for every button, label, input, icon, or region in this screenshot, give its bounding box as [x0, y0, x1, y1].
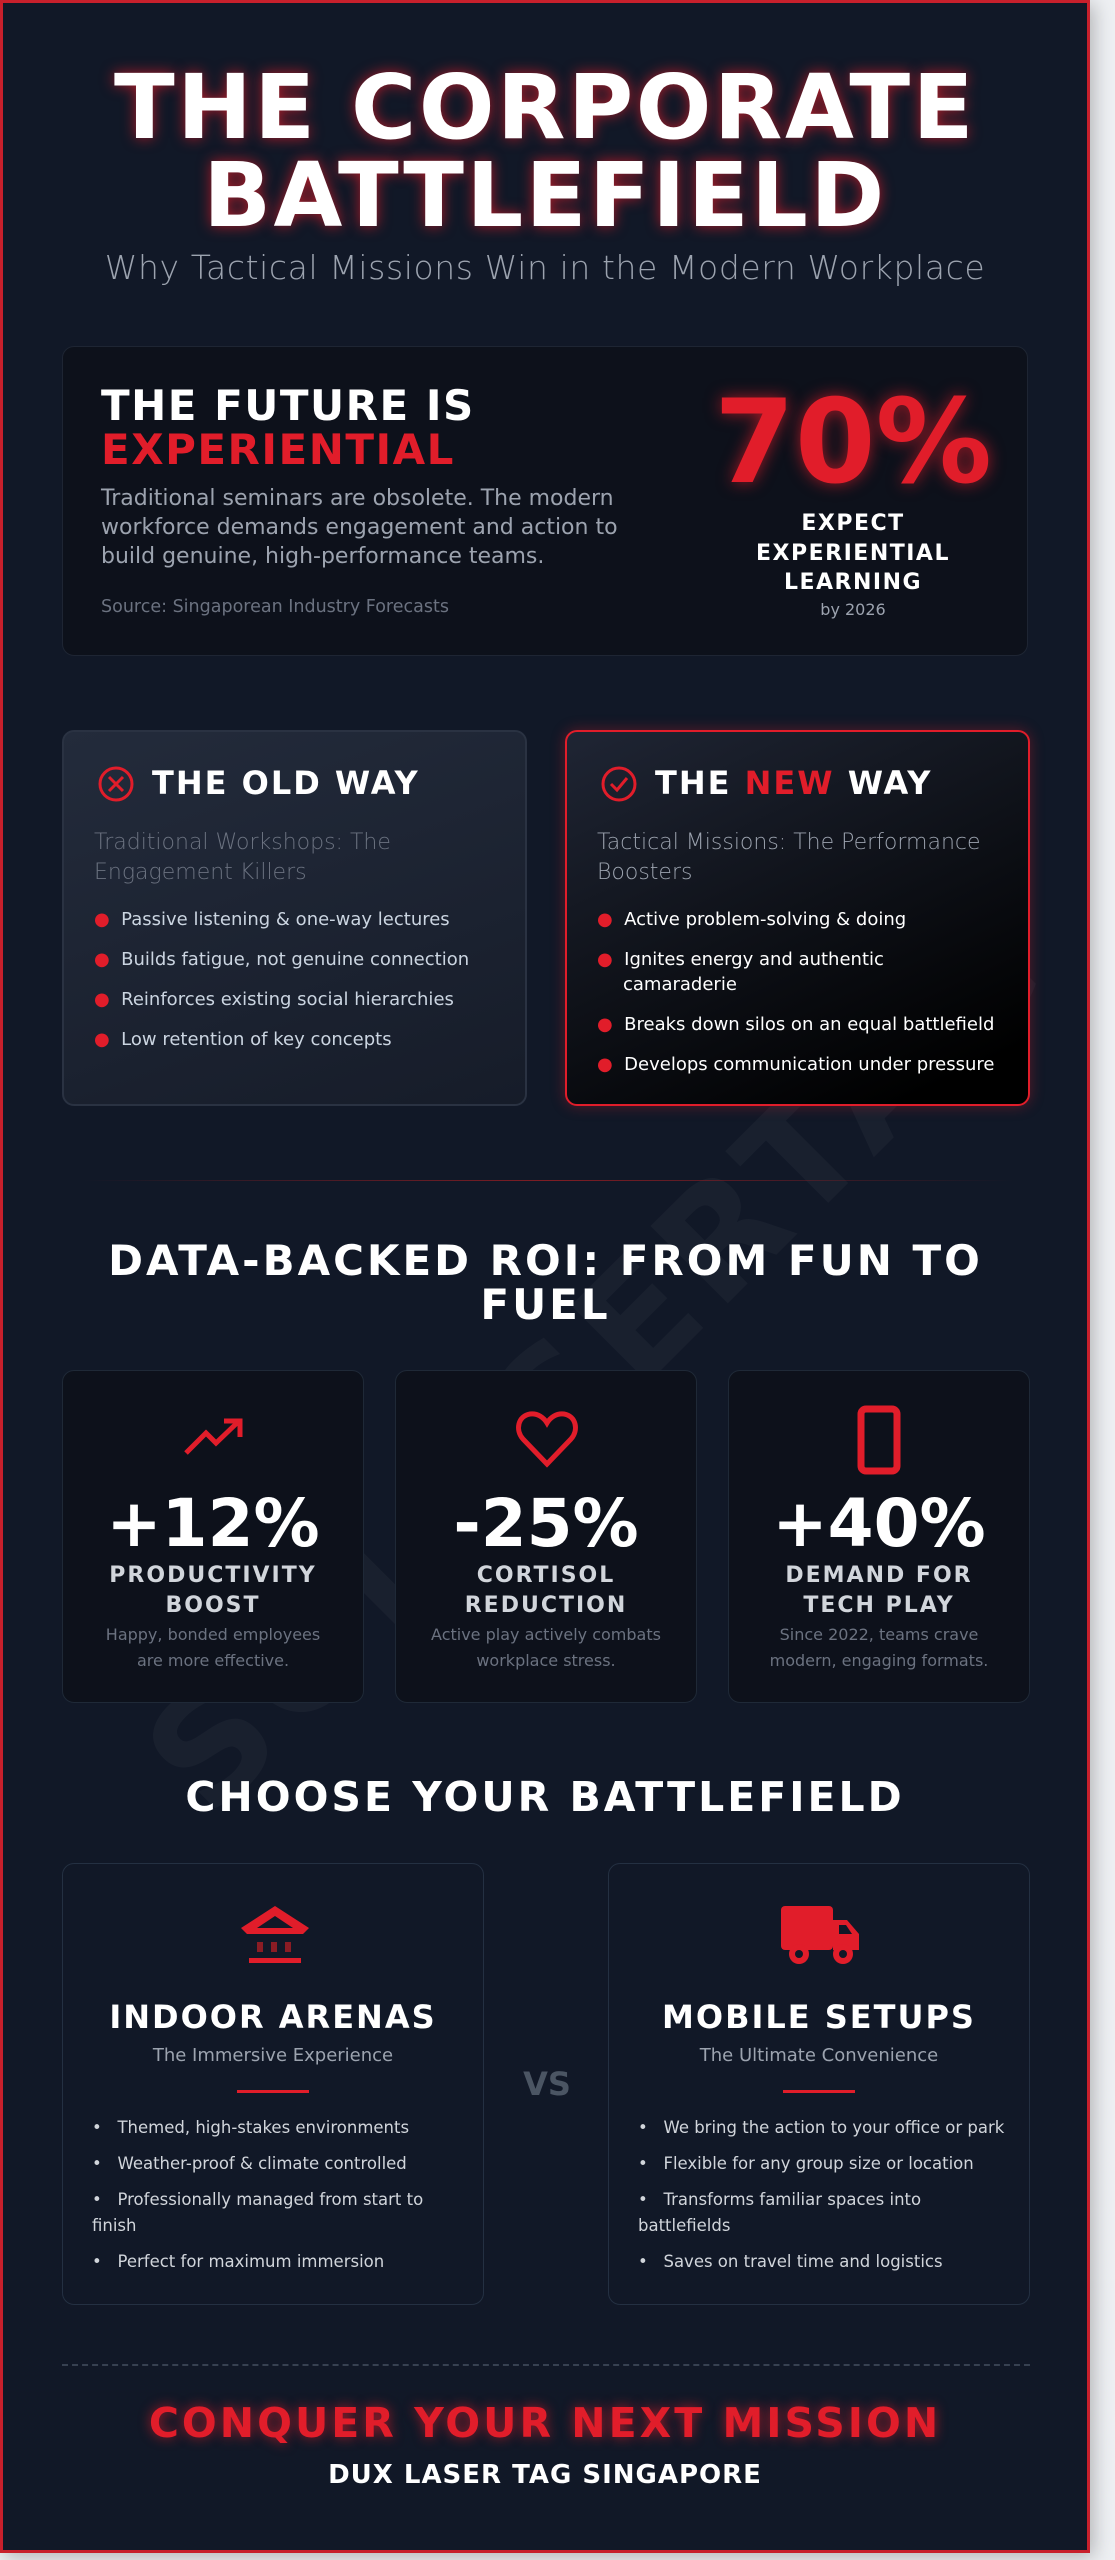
- subtitle: new: Tactical Missions: The Performance Boosters: [597, 830, 981, 885]
- list: mobile: • Flexible for any group size or location: [638, 2154, 974, 2173]
- heading: future: EXPERIENTIAL: [101, 425, 455, 474]
- card: mobile setups: MOBILE SETUPS: [662, 1998, 976, 2036]
- card: indoor arenas: The Immersive Experience: [153, 2045, 393, 2066]
- list: indoor: • Perfect for maximum immersion: [92, 2252, 384, 2271]
- list: mobile: • Transforms familiar spaces into battlefields: [638, 2190, 921, 2235]
- list: mobile: • Saves on travel time and logistics: [638, 2252, 943, 2271]
- card: mobile setups: [608, 1863, 1030, 2305]
- stat card: productivity: [62, 1370, 364, 1703]
- panel: future is experiential: [62, 346, 1028, 656]
- stat card: productivity: are more effective.: [137, 1651, 289, 1670]
- icon: phone: [858, 1406, 900, 1474]
- list: old: ● Builds fatigue, not genuine connection: [94, 949, 469, 970]
- heading: future: THE FUTURE IS: [101, 381, 475, 430]
- stat card: tech play: [728, 1370, 1030, 1703]
- icon: trend up: [184, 1418, 242, 1455]
- stat card: tech play: Since 2022, teams crave: [780, 1625, 978, 1644]
- list: new: ● Ignites energy and authentic: [597, 949, 884, 970]
- list: new: ● Develops communication under pressure: [597, 1054, 994, 1075]
- stat: 70%: EXPECT: [801, 511, 905, 536]
- heading: choose your battlefield: CHOOSE YOUR BATTLEFIELD: [185, 1773, 905, 1821]
- stat: 70%: 70%: [714, 375, 992, 510]
- list: indoor: • Weather-proof & climate controlled: [92, 2154, 407, 2173]
- stat card: cortisol: workplace stress.: [476, 1651, 616, 1670]
- stat card: productivity: BOOST: [165, 1593, 261, 1618]
- stat card: cortisol: -25%: [453, 1485, 639, 1562]
- text: paragraph: Traditional seminars are obsolete. The modern workforce demands engagement and action to build genuine, high-performance teams.: [101, 486, 618, 569]
- icon: check circle: [602, 766, 636, 802]
- list: indoor: • Themed, high-stakes environments: [92, 2118, 409, 2137]
- card: mobile setups: The Ultimate Convenience: [700, 2045, 938, 2066]
- card: indoor arenas: [62, 1863, 484, 2305]
- card: indoor arenas: INDOOR ARENAS: [109, 1998, 437, 2036]
- panel: new way: [565, 730, 1030, 1106]
- title: THE CORPORATE: [114, 55, 976, 159]
- list: new: ● Active problem-solving & doing: [597, 909, 906, 930]
- list: new: [597, 909, 994, 1075]
- subtitle: Why Tactical Missions Win in the Modern Workplace: [105, 248, 985, 287]
- heading: data-backed roi: DATA-BACKED ROI: FROM FUN TO FUEL: [108, 1236, 983, 1329]
- list: old: ● Low retention of key concepts: [94, 1029, 392, 1050]
- panel: old way: [62, 730, 527, 1106]
- subtitle: old: Traditional Workshops: The Engagement Killers: [94, 830, 391, 885]
- icon: x circle: [98, 766, 134, 802]
- icon: heart: [516, 1411, 578, 1468]
- list: indoor: • Professionally managed from start to finish: [92, 2190, 423, 2235]
- heading: old way: THE OLD WAY: [152, 764, 420, 802]
- stat: 70%: EXPERIENTIAL: [756, 540, 950, 566]
- footer: call to action: CONQUER YOUR NEXT MISSION: [149, 2399, 941, 2447]
- text: source: Source: Singaporean Industry Forecasts: [101, 597, 449, 617]
- icon: arena: [241, 1906, 309, 1963]
- list: old: ● Reinforces existing social hierarchies: [94, 989, 454, 1010]
- stat card: productivity: PRODUCTIVITY: [109, 1563, 317, 1588]
- footer: brand: DUX LASER TAG SINGAPORE: [328, 2460, 762, 2490]
- heading: new way: THE NEW WAY: [655, 764, 932, 802]
- icon: truck: [781, 1906, 859, 1964]
- list: new: ● Breaks down silos on an equal battlefield: [597, 1014, 994, 1035]
- stat card: cortisol: Active play actively combats: [431, 1625, 661, 1644]
- stat: 70%: [712, 375, 999, 618]
- stat card: cortisol: [395, 1370, 697, 1703]
- list: indoor: [92, 2118, 423, 2271]
- stat card: tech play: +40%: [772, 1485, 986, 1562]
- stat card: cortisol: CORTISOL: [477, 1563, 615, 1588]
- stat: 70%: LEARNING: [784, 570, 922, 595]
- stat card: tech play: TECH PLAY: [803, 1593, 955, 1618]
- list: mobile: • We bring the action to your office or park: [638, 2118, 1004, 2137]
- stat card: productivity: Happy, bonded employees: [106, 1625, 320, 1644]
- stat card: tech play: modern, engaging formats.: [770, 1651, 988, 1670]
- stat card: productivity: +12%: [106, 1485, 320, 1562]
- stat: 70%: by 2026: [820, 600, 886, 618]
- text: vs: VS: [523, 2065, 571, 2103]
- watermark: SOLASERTAG: [113, 877, 1082, 1846]
- list: new: camaraderie: [623, 974, 737, 995]
- stat card: tech play: DEMAND FOR: [785, 1563, 973, 1588]
- list: old: [94, 909, 469, 1050]
- title: BATTLEFIELD: [203, 143, 887, 247]
- title: [106, 55, 976, 247]
- stat card: cortisol: REDUCTION: [465, 1593, 627, 1618]
- heading: future: [101, 381, 475, 474]
- list: old: ● Passive listening & one-way lectures: [94, 909, 450, 930]
- list: mobile: [638, 2118, 1004, 2271]
